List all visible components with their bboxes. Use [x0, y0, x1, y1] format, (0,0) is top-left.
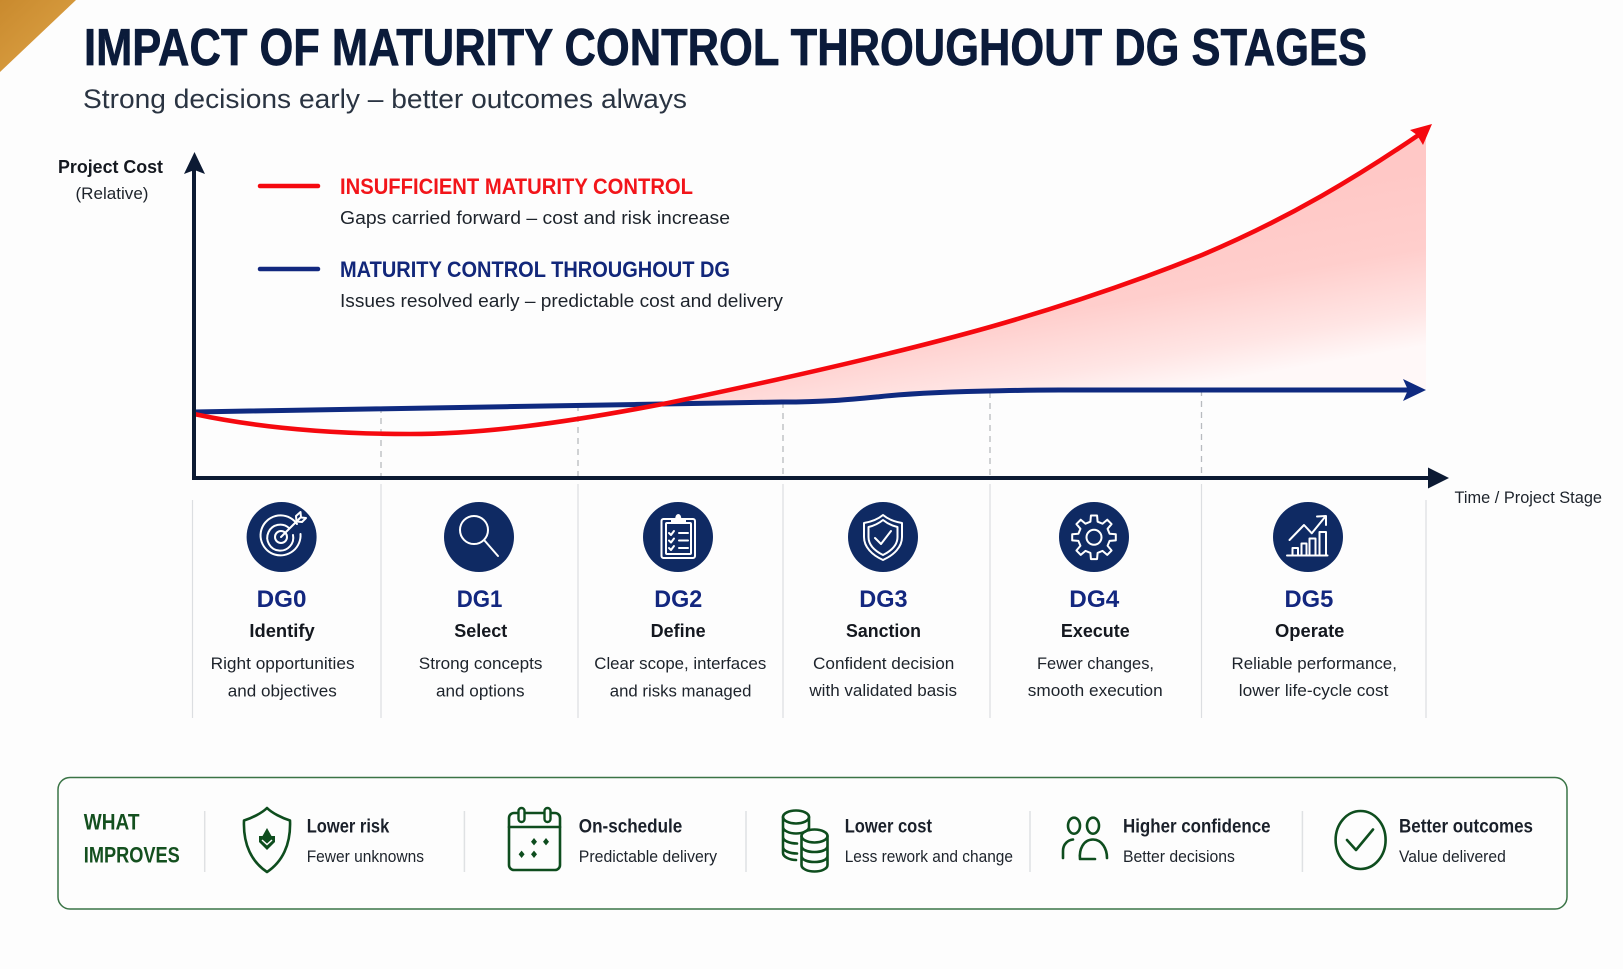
- legend: maturity control throughout DG: MATURITY CONTROL THROUGHOUT DG: [340, 257, 730, 282]
- icon: shield: [244, 808, 290, 872]
- stage: DG5 Operate: Operate: [1275, 621, 1344, 641]
- stage: DG5 Operate: DG5: [1284, 586, 1333, 613]
- benefit: lower cost: [783, 810, 1013, 872]
- stage: DG3 Sanction: Sanction: [846, 621, 921, 641]
- stage: DG3 Sanction: [808, 502, 957, 700]
- corner accent: [0, 0, 76, 72]
- panel heading: WHAT: [84, 809, 140, 834]
- panel heading: [84, 809, 180, 868]
- icon: clipboard: [643, 502, 713, 572]
- legend: insufficient maturity control: Gaps carried forward – cost and risk increase: [340, 207, 730, 228]
- stage: DG2 Define: and risks managed: [610, 682, 751, 700]
- legend: maturity control throughout DG: Issues resolved early – predictable cost and delivery: [340, 290, 784, 311]
- y axis label: Project Cost: [58, 157, 163, 177]
- line: maturity control curve: [194, 379, 1426, 412]
- stage: DG0 Identify: Identify: [249, 621, 315, 641]
- stage: DG5 Operate: lower life-cycle cost: [1239, 681, 1389, 700]
- benefit: on-schedule: [509, 808, 717, 870]
- y axis label: (Relative): [76, 184, 148, 203]
- legend: insufficient maturity control: [260, 174, 730, 228]
- stage: DG4 Execute: Execute: [1061, 621, 1130, 641]
- icon: target: [247, 502, 317, 572]
- stage: DG0 Identify: [211, 502, 355, 700]
- icon: calendar: [509, 808, 560, 870]
- benefit: higher confidence: Better decisions: [1123, 847, 1235, 866]
- stage: DG3 Sanction: Confident decision: [813, 654, 954, 673]
- stage: DG2 Define: DG2: [654, 586, 702, 613]
- stage: DG4 Execute: Fewer changes,: [1037, 654, 1154, 673]
- stage: DG0 Identify: Right opportunities: [211, 654, 355, 673]
- benefit: lower cost: Lower cost: [845, 817, 933, 838]
- x axis label: Time / Project Stage: [1454, 488, 1602, 507]
- icon: shield check: [848, 502, 918, 572]
- stage: DG3 Sanction: DG3: [859, 586, 908, 613]
- benefit: better outcomes: Better outcomes: [1399, 817, 1533, 838]
- benefit: lower cost: Less rework and change: [845, 847, 1013, 866]
- icon: people: [1063, 818, 1107, 859]
- benefit: on-schedule: Predictable delivery: [579, 847, 717, 866]
- stage: DG1 Select: DG1: [457, 586, 502, 613]
- stage: DG0 Identify: DG0: [257, 586, 306, 613]
- legend: insufficient maturity control: INSUFFICIENT MATURITY CONTROL: [340, 174, 693, 199]
- stage: DG4 Execute: [1028, 502, 1163, 700]
- icon: check circle: [1336, 811, 1386, 869]
- stage: DG1 Select: and options: [436, 682, 524, 700]
- benefit: higher confidence: Higher confidence: [1123, 817, 1270, 838]
- icon: magnifier: [444, 502, 514, 572]
- legend: maturity control throughout DG: [260, 257, 784, 311]
- benefit: better outcomes: Value delivered: [1399, 847, 1506, 866]
- benefit: lower risk: Lower risk: [307, 817, 390, 838]
- icon: coins: [783, 810, 828, 872]
- benefit: higher confidence: [1063, 817, 1270, 866]
- stage: DG5 Operate: Reliable performance,: [1232, 654, 1397, 673]
- stage: DG4 Execute: smooth execution: [1028, 681, 1163, 700]
- benefit: lower risk: [244, 808, 424, 872]
- icon: gear: [1059, 502, 1129, 572]
- chart: project cost over time: [58, 124, 1602, 507]
- stage: DG1 Select: Strong concepts: [419, 654, 542, 673]
- y axis label: [58, 157, 163, 203]
- panel heading: IMPROVES: [84, 843, 180, 868]
- stage: DG3 Sanction: with validated basis: [808, 681, 957, 700]
- icon: growth chart: [1273, 502, 1343, 572]
- shaded gap between curves: [680, 134, 1426, 402]
- line: insufficient control curve: [194, 124, 1432, 434]
- stage: DG2 Define: [594, 502, 766, 700]
- stage: DG2 Define: Clear scope, interfaces: [594, 654, 766, 673]
- y axis: [184, 152, 205, 479]
- benefit: on-schedule: On-schedule: [579, 817, 682, 838]
- subtitle: Strong decisions early – better outcomes always: [83, 84, 687, 114]
- benefit: better outcomes: [1336, 811, 1533, 869]
- stage: DG1 Select: [419, 502, 542, 700]
- stage: DG1 Select: Select: [454, 621, 507, 641]
- x axis: [192, 468, 1449, 488]
- panel: what improves: [58, 778, 1567, 909]
- stage: DG5 Operate: [1232, 502, 1397, 700]
- stage: DG2 Define: Define: [651, 621, 706, 641]
- benefit: lower risk: Fewer unknowns: [307, 847, 424, 866]
- stage: DG4 Execute: DG4: [1069, 586, 1120, 613]
- stage: DG0 Identify: and objectives: [228, 682, 337, 700]
- title: IMPACT OF MATURITY CONTROL THROUGHOUT DG STAGES: [84, 19, 1367, 77]
